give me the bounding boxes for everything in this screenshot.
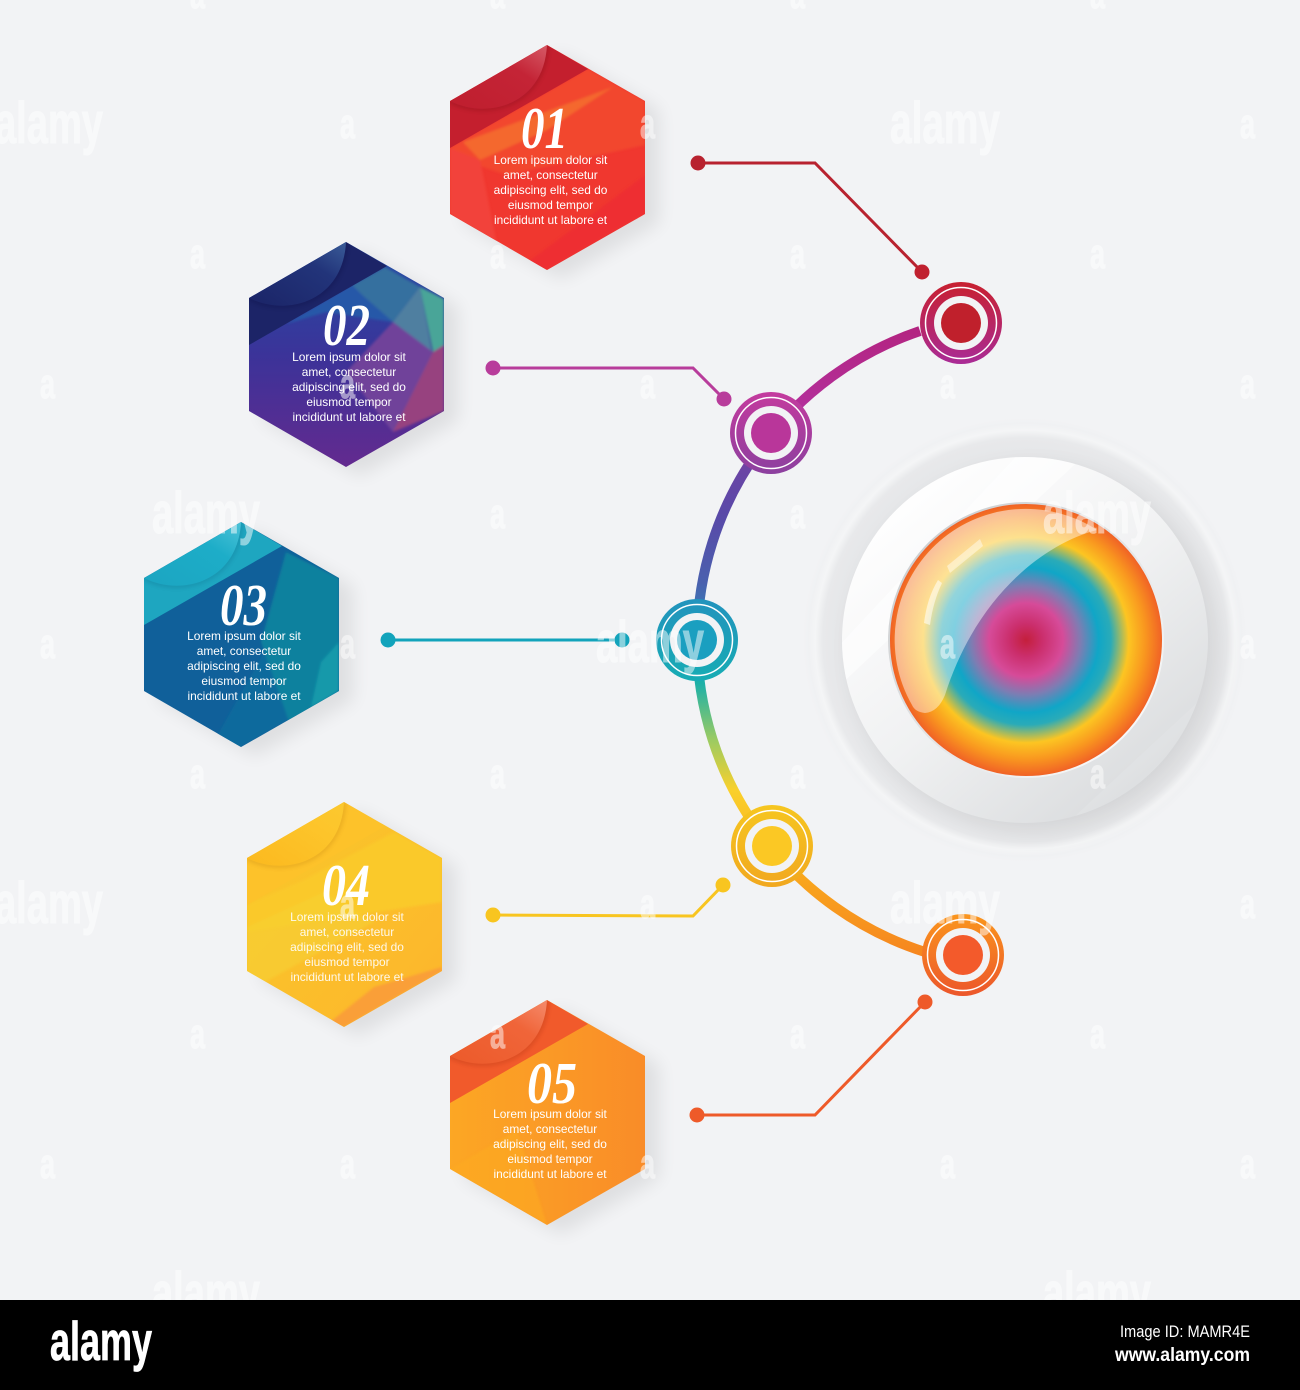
central rainbow button [822, 437, 1230, 844]
watermarks: a [1240, 880, 1255, 927]
text 05: amet, consectetur [503, 1122, 597, 1136]
hexagon 04 [247, 802, 456, 1036]
watermarks: alamy [1043, 1261, 1151, 1326]
text 03 [187, 629, 302, 703]
connector 2 [486, 360, 732, 406]
text 05: adipiscing elit, sed do [493, 1137, 607, 1151]
number 03: 03 [220, 572, 267, 638]
watermarks: a [790, 1010, 805, 1057]
text 02: Lorem ipsum dolor sit [292, 350, 407, 364]
watermarks: a [340, 1140, 355, 1187]
text 01: Lorem ipsum dolor sit [494, 153, 608, 167]
watermarks: alamy [152, 1261, 260, 1326]
watermarks: a [790, 750, 805, 797]
text 03: Lorem ipsum dolor sit [187, 629, 302, 643]
watermarks: a [1090, 750, 1105, 797]
watermarks: a [940, 1140, 955, 1187]
text 04: incididunt ut labore et [290, 970, 404, 984]
node 3 [656, 599, 738, 681]
watermarks: a [1090, 230, 1105, 277]
watermarks: a [1240, 620, 1255, 667]
text 02: amet, consectetur [302, 365, 396, 379]
watermarks: a [340, 620, 355, 667]
text 03: adipiscing elit, sed do [187, 659, 301, 673]
text 02 [292, 350, 407, 424]
text 04: Lorem ipsum dolor sit [290, 910, 405, 924]
number 05: 05 [527, 1050, 577, 1116]
watermarks: a [1240, 360, 1255, 407]
watermarks: a [640, 880, 655, 927]
watermarks: a [40, 360, 55, 407]
watermarks: a [490, 1010, 505, 1057]
button halo [803, 418, 1247, 862]
text 03: eiusmod tempor [201, 674, 287, 688]
watermarks: a [640, 360, 655, 407]
footer logo: alamy [50, 1310, 152, 1372]
text 01: incididunt ut labore et [494, 213, 608, 227]
text 03: amet, consectetur [197, 644, 291, 658]
node 5 [922, 914, 1004, 996]
watermarks: a [490, 750, 505, 797]
watermarks: a [640, 100, 655, 147]
connector 4 [486, 878, 730, 922]
watermarks: a [1090, 1010, 1105, 1057]
number 01: 01 [521, 95, 568, 161]
hexagon 01 [450, 45, 659, 279]
text 02: eiusmod tempor [306, 395, 392, 409]
button plate [835, 450, 1225, 830]
watermarks: a [490, 230, 505, 277]
watermarks: a [40, 1140, 55, 1187]
watermarks: a [40, 620, 55, 667]
text 03: incididunt ut labore et [187, 689, 301, 703]
text 01: adipiscing elit, sed do [494, 183, 608, 197]
footer bar [0, 1300, 1300, 1390]
watermarks: a [190, 1010, 205, 1057]
watermarks: a [190, 750, 205, 797]
text 01: eiusmod tempor [508, 198, 593, 212]
text 01: amet, consectetur [503, 168, 598, 182]
text 04: amet, consectetur [300, 925, 394, 939]
text 04: adipiscing elit, sed do [290, 940, 404, 954]
watermarks: a [790, 230, 805, 277]
footer image id: Image ID: MAMR4E [1120, 1322, 1250, 1341]
number 02: 02 [323, 292, 370, 358]
watermarks: alamy [1043, 481, 1151, 546]
watermarks: a [640, 1140, 655, 1187]
node 4 [731, 805, 813, 887]
hexagon 03 [144, 522, 353, 756]
rainbow disc [889, 503, 1163, 777]
text 05: Lorem ipsum dolor sit [493, 1107, 608, 1121]
text 05 [493, 1107, 608, 1181]
watermarks: alamy [596, 610, 704, 675]
text 05: incididunt ut labore et [493, 1167, 607, 1181]
watermarks: a [940, 620, 955, 667]
watermarks: a [190, 230, 205, 277]
timeline arc [697, 331, 925, 952]
hexagon 05 [450, 1000, 659, 1234]
watermarks: alamy [890, 871, 1000, 936]
text 05: eiusmod tempor [507, 1152, 593, 1166]
button plate shadow [852, 467, 1218, 833]
watermarks: a [340, 880, 355, 927]
text 02: adipiscing elit, sed do [292, 380, 406, 394]
watermarks: a [340, 100, 355, 147]
watermarks: a [790, 490, 805, 537]
text 04: eiusmod tempor [304, 955, 390, 969]
watermarks: a [1240, 1140, 1255, 1187]
connector 5 [690, 994, 932, 1122]
node 1 [920, 282, 1002, 364]
connector 1 [690, 156, 930, 280]
footer url: www.alamy.com [1114, 1345, 1250, 1366]
watermarks: a [1240, 100, 1255, 147]
watermarks: alamy [152, 481, 260, 546]
connector 3 [380, 632, 630, 648]
watermarks: a [490, 490, 505, 537]
watermarks: a [940, 360, 955, 407]
watermarks: a [340, 360, 355, 407]
hexagon 02 [249, 242, 458, 476]
text 02: incididunt ut labore et [292, 410, 406, 424]
text 04 [290, 910, 405, 984]
text 01 [494, 153, 608, 227]
node 2 [730, 392, 812, 474]
number 04: 04 [322, 852, 370, 918]
watermarks: alamy [890, 91, 1000, 156]
